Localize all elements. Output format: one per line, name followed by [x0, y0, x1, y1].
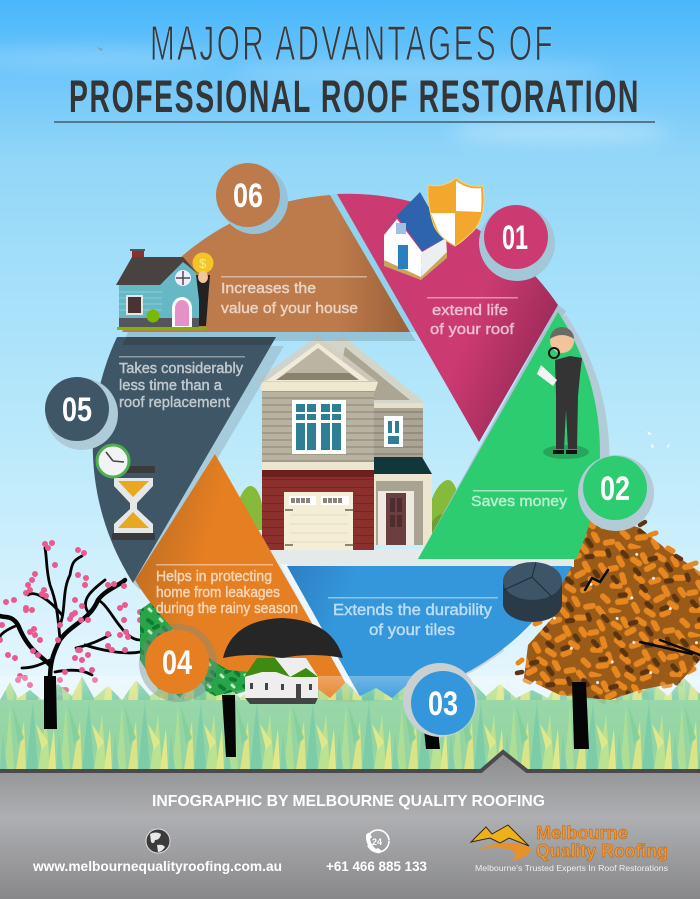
icon: man with magnifier — [537, 327, 589, 459]
panel 02: green — [418, 312, 600, 559]
logo: Melbourne Quality Roofing — [471, 823, 668, 873]
logo: Melbourne Quality Roofing: Melbourne — [536, 823, 628, 843]
panel 06: brown: Increases the — [221, 280, 316, 297]
panel 04: orange: home from leakages — [156, 584, 280, 601]
house: central illustration — [236, 335, 574, 567]
footer heading: INFOGRAPHIC BY MELBOURNE QUALITY ROOFING — [152, 793, 545, 810]
badge 05: 05 — [62, 391, 92, 429]
house ground — [262, 549, 574, 567]
badge 06: 06 — [233, 177, 263, 215]
house porch — [374, 457, 432, 546]
icon: house with coin and man — [116, 249, 214, 330]
icon: tile disc — [503, 562, 562, 622]
house bushes — [236, 480, 462, 545]
panel 06: brown: value of your house — [221, 300, 358, 317]
house right wing — [310, 337, 425, 458]
badge 04: 04 — [162, 644, 192, 682]
panel 05: slate — [93, 337, 276, 583]
house garage — [262, 470, 374, 550]
panel 01: magenta — [337, 194, 558, 442]
grass — [0, 676, 700, 770]
title — [54, 17, 655, 123]
tree: green crown — [140, 555, 360, 700]
badge 05 — [45, 377, 118, 450]
badge 01: 01 — [502, 219, 528, 257]
panel 01: magenta: extend life — [432, 302, 508, 319]
tree: pink blossom crown — [0, 543, 140, 698]
icon: umbrella and house — [223, 618, 343, 704]
badge 06 — [216, 163, 288, 234]
panel 05: slate: Takes considerably — [119, 360, 243, 377]
house front gable — [254, 335, 378, 391]
panel 01: magenta: of your roof — [430, 321, 515, 338]
panel shadows — [124, 194, 609, 690]
panel 03: blue: Extends the durability — [333, 602, 492, 619]
panel 05: slate: less time than a — [119, 377, 223, 394]
tree: autumn crown — [517, 510, 700, 706]
website text: www.melbournequalityroofing.com.au — [32, 858, 282, 874]
logo: Melbourne Quality Roofing: Melbourne's Trusted Experts In Roof Restorations — [475, 864, 668, 873]
badge 02: 02 — [600, 470, 630, 508]
icon: hourglass and clock — [97, 445, 155, 540]
icon: house with coin and man: $ — [199, 256, 207, 271]
panel 05: slate: roof replacement — [119, 394, 231, 411]
logo roofs — [471, 825, 531, 861]
panel 03: blue: of your tiles — [369, 622, 455, 639]
panel 04: orange — [135, 454, 357, 702]
badge 03: 03 — [428, 685, 458, 723]
tree: crown fronts above grass — [205, 668, 692, 700]
icon: globe — [146, 829, 170, 853]
panel 06: brown — [122, 195, 410, 332]
logo: Melbourne Quality Roofing: Quality Roofing — [536, 841, 668, 861]
icon: phone 24: 24 — [372, 837, 382, 847]
icon: blue house and shield — [380, 178, 484, 280]
badge 02 — [578, 455, 654, 531]
badge 04 — [139, 624, 217, 702]
badge 03 — [403, 663, 477, 737]
badge 01 — [479, 205, 555, 281]
icon: phone 24 — [366, 830, 389, 853]
panel 03: blue — [280, 564, 572, 702]
tree trunks — [44, 676, 589, 757]
panel 04: orange: during the rainy season — [156, 600, 298, 617]
panel 02: green: Saves money — [471, 493, 568, 510]
panel 04: orange: Helps in protecting — [156, 568, 272, 585]
phone text: +61 466 885 133 — [326, 858, 427, 874]
footer band — [0, 751, 700, 899]
house front wall — [262, 391, 374, 470]
